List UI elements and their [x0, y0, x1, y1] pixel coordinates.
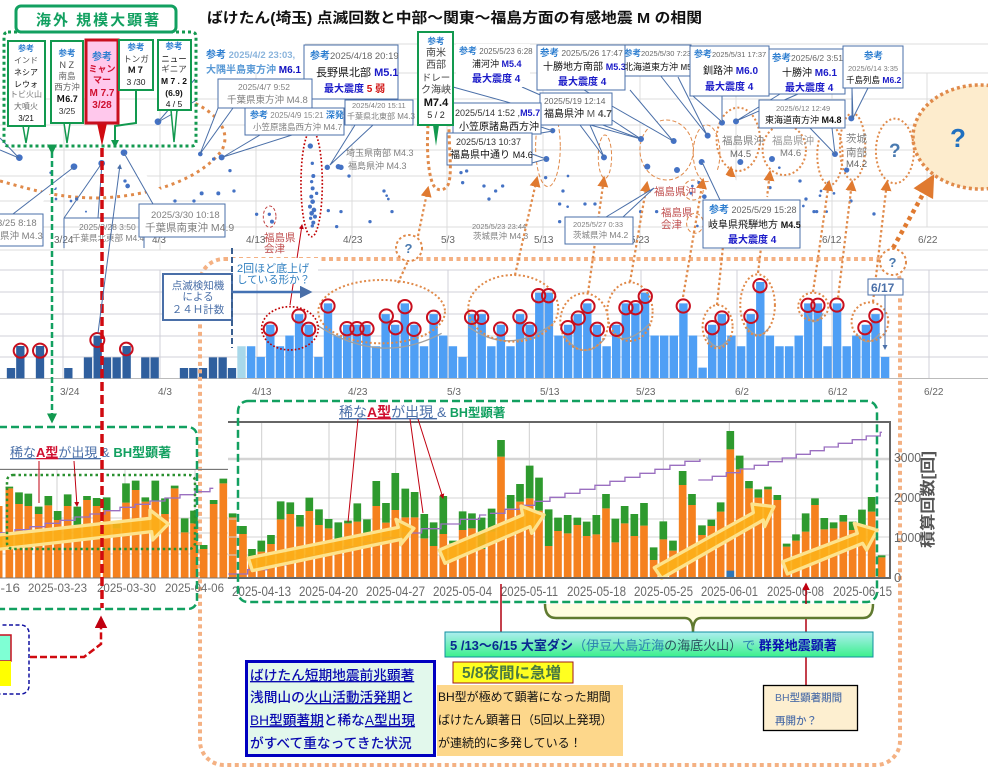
left chart date labels: 2025-03-30 [97, 583, 156, 595]
scatter date axis labels: 4/23 [343, 235, 363, 246]
region labels in ellipses: 会津 [661, 218, 682, 231]
callout: 5/14 [453, 103, 553, 134]
date labels: 2025-05-11 [501, 584, 558, 599]
card: Indonesia: 3/21 [18, 114, 34, 123]
card: New Guinea: ニュー [161, 54, 187, 64]
title: ばけたん(埼玉) 点滅回数と中部～関東～福島方面の有感地震 M の相関 [207, 9, 702, 27]
card: Tonga: 参考 [127, 42, 145, 52]
bar chart date labels: 5/3 [447, 387, 461, 398]
card: Myanmar: 参考 [92, 50, 112, 63]
card: Tonga: 3 /30 [127, 77, 146, 87]
callout: 4/9: 参考 2025/4/9 15:21 深発 [250, 109, 344, 120]
region labels in ellipses: 福島県 [661, 206, 692, 219]
region labels in ellipses: M4.2 [846, 159, 867, 170]
note: bottom raised [233, 258, 318, 286]
scatter date axis labels: 5/3 [441, 235, 455, 246]
text block: blue summary: ばけたん短期地震前兆顕著 [250, 667, 414, 683]
scatter date axis labels: 6/2 [729, 235, 743, 246]
card: Myanmar: マー [93, 75, 111, 85]
blue arrow from bar to 3/28 point [98, 165, 120, 333]
callout: 5/29 [702, 162, 801, 248]
callout: 5/29: 岐阜県飛騨地方 M4.5 [708, 218, 801, 231]
dark blue bars before April [11, 336, 232, 378]
y axis values: 3000 [894, 450, 921, 465]
heading: overseas [16, 6, 176, 32]
large question-mark ellipse [913, 85, 988, 189]
callout: 5/14: 2025/5/14 1:52 ,M5.7 [455, 108, 540, 118]
date labels: 2025-06-08 [767, 584, 824, 599]
label: 6/17 [868, 279, 903, 349]
label: blink detector count: 点滅検知機 [172, 279, 225, 292]
date labels: 2025-05-25 [634, 584, 693, 599]
card: Drake Passage: ドレー [422, 73, 450, 84]
scatter date axis labels: 6/22 [918, 235, 938, 246]
callout: 4/7 [200, 79, 312, 154]
callout: 4/2 [158, 48, 301, 122]
callout: 6/12 [759, 100, 845, 154]
card: New Guinea: 4 / 5 [166, 99, 183, 109]
card: New Guinea: ギニア [161, 64, 187, 74]
region labels in ellipses: M4.5 [730, 149, 751, 160]
dotted orange curve around overseas events [0, 102, 225, 198]
label: blink detector count [163, 274, 232, 320]
panel: overseas large-scale events [4, 6, 196, 146]
region labels in ellipses [264, 133, 867, 255]
callout: 5/31: 釧路沖 M6.0 [703, 64, 758, 77]
left chart date labels [0, 583, 224, 595]
callout: 6/2: 参考2025/6/2 3:51 [772, 52, 843, 64]
red dashed line from Myanmar to chart [100, 148, 104, 608]
label: 6/17: 6/17 [871, 281, 895, 295]
callout: 6/12: 2025/6/12 12:49 [776, 104, 830, 113]
callout: 5/31: 最大震度 4 [705, 80, 754, 93]
card: Indonesia: ネシア [14, 68, 38, 77]
inner dotted green box [7, 475, 195, 549]
label: blink detector count: による [182, 291, 214, 303]
band: Omuro-dashi period [445, 632, 873, 657]
label: blink detector count: ２４Ｈ計数 [172, 303, 225, 316]
card: New Guinea: 参考 [165, 41, 183, 51]
dark red vertical pointers [501, 584, 806, 685]
callout: 5/30 [624, 45, 707, 135]
text block: blue summary: がすべて重なってきた状況 [250, 735, 412, 751]
callout: 3/28 3:50: 2025/3/28 3:50 [79, 222, 136, 232]
card: Myanmar [86, 40, 118, 146]
card: New Guinea: M 7 . 2 [161, 76, 187, 86]
callout: 4/20 [330, 100, 416, 165]
red arrow to dense cluster [290, 225, 302, 305]
light blue bars [251, 282, 885, 378]
callout: 4/18 [304, 45, 399, 99]
bar chart date labels: 4/13 [252, 387, 272, 398]
callout: 5/27 [565, 188, 654, 244]
bar chart date labels [60, 387, 944, 398]
yellow-orange trend arrows [248, 519, 414, 571]
card: New Guinea [158, 40, 191, 142]
card: Myanmar: 3/28 [92, 100, 112, 111]
card: New Zealand: ＮＺ [58, 60, 76, 70]
callout: 6/2 [736, 49, 845, 121]
callout: 5/19: 福島県沖 M 4.7 [544, 107, 612, 120]
region labels in ellipses: 福島県 [264, 231, 296, 244]
dotted green frame [4, 32, 196, 146]
scatter date axis labels: 5/13 [534, 235, 554, 246]
bar chart date labels: 5/13 [540, 387, 560, 398]
card: New Zealand: Ｍ6.7 [56, 94, 78, 104]
green dashed frame [238, 401, 877, 602]
bar chart date labels: 6/22 [924, 387, 944, 398]
callout: 3/28 3:50: 千葉県北東部 M4.4 [72, 233, 145, 243]
left yellow-orange trend arrow [0, 510, 168, 549]
text block: BH resumption: 再開か？ [775, 715, 817, 727]
callout: 4/7: 千葉県東方沖 M4.8 [227, 94, 308, 106]
callout: 3/25 [0, 167, 74, 246]
label: 5/8 surge: 5/8夜間に急増 [462, 663, 561, 682]
callout: 6/12: 東海道南方沖 M4.8 [765, 114, 842, 125]
large question-mark ellipse: ? [950, 123, 966, 153]
card: New Zealand: 南島 [58, 71, 76, 81]
date labels: 2025-04-27 [366, 584, 425, 599]
callout: 5/30: 参考2025/5/30 7:23, [624, 48, 693, 58]
callout: 5/23 6:28: 浦河沖 M5.4 [472, 58, 522, 69]
orange ellipses around peak days [262, 274, 888, 350]
lower-left chart [0, 427, 233, 609]
bar chart date labels: 5/23 [636, 387, 656, 398]
card: Tonga: Ｍ７ [127, 65, 145, 75]
scatter date axis labels: 3/24 [54, 235, 74, 246]
callout: 6/14: 千島列島 M6.2 [846, 75, 902, 85]
label: 5/8 surge [453, 662, 573, 683]
left green dashed frame [0, 427, 197, 609]
grey arcs under orange groupings [317, 313, 880, 350]
date labels: 2025-04-13 [232, 584, 291, 599]
red pointers right [348, 419, 443, 522]
text block: blue summary: 浅間山の火山活動活発期と [250, 690, 414, 705]
date labels: 2025-06-15 [833, 584, 892, 599]
red pointers left [39, 461, 77, 506]
callout: 5/13: 2025/5/13 10:37 [456, 137, 521, 147]
callout: 5/23 6:28: 参考 2025/5/23 6:28 [459, 45, 533, 56]
green dashed vertical link with arrows [51, 152, 53, 421]
region labels in ellipses: 南部 [846, 146, 867, 159]
callout: 4/9: 小笠原諸島西方沖 M4.7 [253, 122, 343, 132]
left chart annotation: 稀なA型が出現 & BH型顕著 [10, 445, 171, 460]
card: Tonga: トンガ [123, 54, 149, 64]
region labels in ellipses: 福島県沖 [722, 134, 764, 147]
left chart bars [0, 479, 233, 578]
date labels: 2025-06-01 [701, 584, 758, 599]
pointer to far-left point [0, 138, 19, 158]
card: Drake Passage: 南米 [426, 46, 446, 59]
region labels in ellipses: 2025/5/23 23:44 [472, 222, 526, 231]
question circle left [396, 235, 422, 261]
bar chart date labels: 6/12 [828, 387, 848, 398]
callout: 5/23 6:28: 最大震度 4 [472, 72, 521, 85]
question circle right: ? [888, 255, 896, 270]
y axis values: 2000 [894, 490, 921, 505]
callout: 4/9 [223, 108, 344, 157]
bar chart date labels: 3/24 [60, 387, 80, 398]
y axis values: 1000 [894, 530, 921, 545]
callout: 5/29: 参考 2025/5/29 15:28 [709, 203, 797, 216]
orange dotted arrows from bar chart to scatter chart [398, 168, 887, 305]
text block: BH resumption: BH型顕著期間 [775, 691, 842, 704]
frame lines [228, 422, 890, 578]
baseline [0, 577, 228, 579]
right chart annotation: 稀なA型が出現 & BH型顕著 [339, 404, 505, 420]
callout: 5/13: 福島県中通り M4.6 [450, 148, 533, 161]
region labels in ellipses: 福島県沖 M4.3 [348, 160, 407, 171]
question circle right [880, 249, 906, 275]
blue arrow to right [233, 291, 310, 293]
card: New Zealand: 西方沖 [54, 82, 80, 92]
bar chart date labels: 4/3 [158, 387, 172, 398]
callout: 3/30: 千葉県南東沖 M4.9 [145, 221, 234, 234]
question circle left: ? [404, 241, 412, 256]
note: bottom raised: 2回ほど底上げ [237, 262, 309, 275]
scatter chart: earthquake magnitudes [0, 44, 988, 255]
region labels in ellipses: 会津 [264, 242, 285, 255]
region labels in ellipses: 埼玉県南部 M4.3 [346, 147, 414, 158]
callout: 6/14: 参考 [864, 50, 883, 62]
card: Tonga [115, 40, 153, 146]
callout: 4/20: 2025/4/20 15:11 [352, 101, 406, 110]
region labels in ellipses: 茨城県沖 M4.3 [473, 231, 529, 241]
callout: 5/31 [690, 46, 769, 122]
card: Indonesia: レウォ [14, 80, 38, 89]
callout: 4/18: 参考2025/4/18 20:19 [310, 49, 399, 62]
question mark in ellipse: ? [889, 141, 901, 162]
scatter points [16, 115, 876, 228]
card: Myanmar: M 7.7 [89, 88, 115, 99]
callout: 4/2: 参考 2025/4/2 23:03, [206, 48, 295, 61]
region labels in ellipses: 福島県沖 [654, 185, 696, 198]
event group ellipses (orange and red) [263, 107, 914, 237]
card: Drake Passage: 5 / 2 [427, 110, 445, 120]
callout: 5/29: 最大震度 4 [728, 233, 777, 246]
text block: orange note: ばけたん顕著日（5回以上発現） [438, 713, 613, 727]
callout: 3/28 3:50 [64, 163, 145, 248]
date labels [232, 584, 892, 599]
callout: 5/27: 茨城県沖 M4.2 [573, 230, 629, 240]
callout: 5/14: 小笠原諸島西方沖 [459, 120, 539, 133]
stacked bars part 1 [243, 473, 492, 578]
callout: 5/13 [447, 133, 546, 165]
bar chart: 24h blink counts [0, 270, 988, 398]
callout: 4/18: 最大震度 5 弱 [324, 82, 385, 95]
card: New Guinea: (6.9) [165, 88, 183, 98]
card: Indonesia: 大噴火 [14, 101, 38, 111]
callout: 6/2: 最大震度 4 [785, 81, 834, 94]
text block: orange note [437, 685, 623, 756]
thick orange arrow to large question mark [893, 178, 932, 248]
callout: 6/2: 十勝沖 M6.1 [782, 66, 837, 79]
text block: blue summary [246, 662, 434, 756]
curly bracket for period [545, 604, 873, 632]
scatter date axis labels: 4/13 [246, 235, 266, 246]
scatter date axis labels: 5/23 [630, 235, 650, 246]
scatter date axis labels: 6/12 [822, 235, 842, 246]
callout: 5/26 [537, 45, 673, 141]
card: New Zealand: 3/25 [59, 106, 76, 116]
callout: 3/30 [124, 153, 234, 237]
card: Drake Passage: M7.4 [424, 97, 449, 109]
stacked bars part 2 [501, 431, 882, 578]
card: Drake Passage [418, 32, 453, 190]
region labels in ellipses: M4.6 [780, 148, 801, 159]
first light bar [237, 346, 246, 378]
note: bottom raised: している形か？ [237, 274, 310, 286]
card: New Zealand [51, 41, 83, 143]
blue dashed vertical [231, 248, 233, 348]
card: Drake Passage: 参考 [427, 36, 445, 46]
band: Omuro-dashi period: 5 /13～6/15 大室ダシ（伊豆大島近海の海底火山）で 群発地震顕著 [450, 638, 837, 653]
callout: 3/30: 2025/3/30 10:18 [151, 210, 220, 221]
red dashed arrow up to chart [30, 618, 101, 657]
text block: orange note: BH型が極めて顕著になった期間 [438, 689, 611, 704]
date labels: 2025-05-18 [567, 584, 626, 599]
y axis values [894, 450, 921, 585]
card: Drake Passage: 西部 [426, 59, 446, 71]
callout: 5/31: 参考2025/5/31 17:37 [694, 48, 766, 59]
date labels: 2025-04-20 [299, 584, 358, 599]
callout: 4/7: 2025/4/7 9:52 [238, 82, 290, 92]
card: Drake Passage: ク海峡 [421, 83, 451, 96]
callout: 6/14 [843, 46, 903, 118]
left chart date labels: 2025-03-23 [28, 583, 87, 595]
text block: BH resumption [764, 686, 858, 730]
card: Indonesia: 参考 [18, 43, 34, 53]
region labels in ellipses: 茨城 [846, 133, 867, 145]
bottom-left legend box [0, 625, 29, 694]
callout: 4/18: 長野県北部 M5.1 [316, 66, 399, 79]
callout: 3/25: 県沖 M4.3 [0, 230, 43, 242]
card: Myanmar: ミャン [88, 64, 116, 74]
y axis title: 積算回数[回] [918, 451, 937, 548]
card: New Zealand: 参考 [58, 48, 76, 58]
callout: 5/30: 北海道東方沖 M5.5 [624, 61, 699, 72]
callout: 5/26: 参考 2025/5/26 17:47 [540, 47, 623, 59]
large peach dotted frame [200, 259, 900, 765]
text block: orange note: が連続的に多発している！ [438, 735, 582, 750]
heading: overseas: 海外 規模大顕著 [36, 11, 161, 29]
callout: 4/2: 大隅半島東方沖 M6.1 [206, 63, 301, 76]
callout: 5/23 6:28 [453, 44, 641, 139]
scatter date axis labels [54, 235, 938, 246]
bar chart date labels: 4/23 [348, 387, 368, 398]
callout: 5/26: 十勝地方南部 M5.3 [543, 60, 626, 73]
card: Indonesia: トビ火山 [10, 90, 42, 99]
card: Indonesia [8, 41, 45, 143]
region labels in ellipses: 福島県沖 [772, 134, 814, 147]
bar chart date labels: 6/2 [735, 387, 749, 398]
left chart date labels: 2025-04-06 [165, 583, 224, 595]
callout: 5/19 [540, 93, 641, 157]
cumulative line [228, 432, 882, 574]
date labels: 2025-05-04 [433, 584, 492, 599]
y axis values: 0 [894, 570, 901, 585]
lower-right chart: cumulative counts [228, 401, 937, 602]
callout: 5/19: 2025/5/19 12:14 [544, 96, 606, 106]
callout: 6/14: 2025/6/14 3:35 [848, 64, 898, 73]
text block: blue summary: BH型顕著期と稀なA型出現 [250, 713, 415, 728]
callout: 4/20: 千葉県北東部 M4.3 [347, 111, 416, 121]
card: Indonesia: インド [14, 56, 38, 65]
callout: 5/26: 最大震度 4 [558, 75, 607, 88]
callout: 5/27: 2025/5/27 0:33 [573, 220, 623, 229]
red circles marking notable days [14, 279, 883, 358]
scatter date axis labels: 4/3 [152, 235, 166, 246]
